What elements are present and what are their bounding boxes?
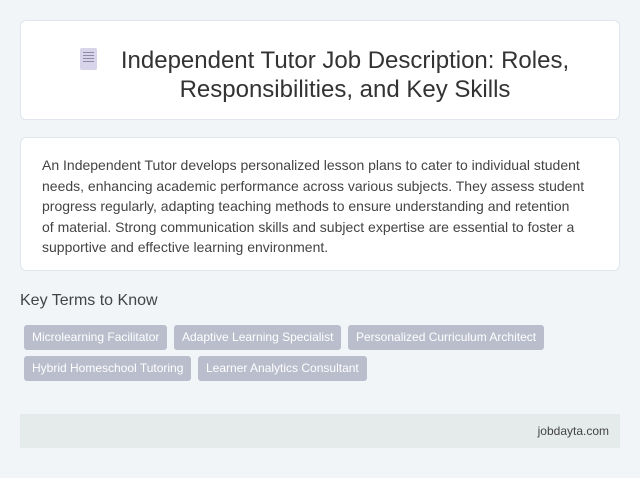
description text: supportive and effective learning environment. [42, 239, 328, 255]
icon: document [80, 48, 97, 70]
description text: progress regularly, adapting teaching methods to ensure understanding and retention [42, 198, 569, 214]
description text: needs, enhancing academic performance across various subjects. They assess student [42, 178, 584, 194]
description text [42, 157, 584, 255]
footer: jobdayta.com [538, 424, 609, 438]
tags: Personalized Curriculum Architect [356, 330, 536, 344]
tags: Adaptive Learning Specialist [182, 330, 333, 344]
header card [20, 20, 620, 120]
title: Independent Tutor Job Description: Roles, Responsibilities, and Key Skills [121, 47, 569, 103]
tags: Microlearning Facilitator [32, 330, 159, 344]
description text: An Independent Tutor develops personalized lesson plans to cater to individual student [42, 157, 580, 173]
description card [20, 137, 620, 271]
key terms heading: Key Terms to Know [20, 292, 158, 309]
description text: of material. Strong communication skills and subject expertise are essential to foster a [42, 218, 574, 234]
tags: Hybrid Homeschool Tutoring [32, 361, 183, 375]
tags: Learner Analytics Consultant [206, 361, 359, 375]
footer [20, 414, 620, 448]
